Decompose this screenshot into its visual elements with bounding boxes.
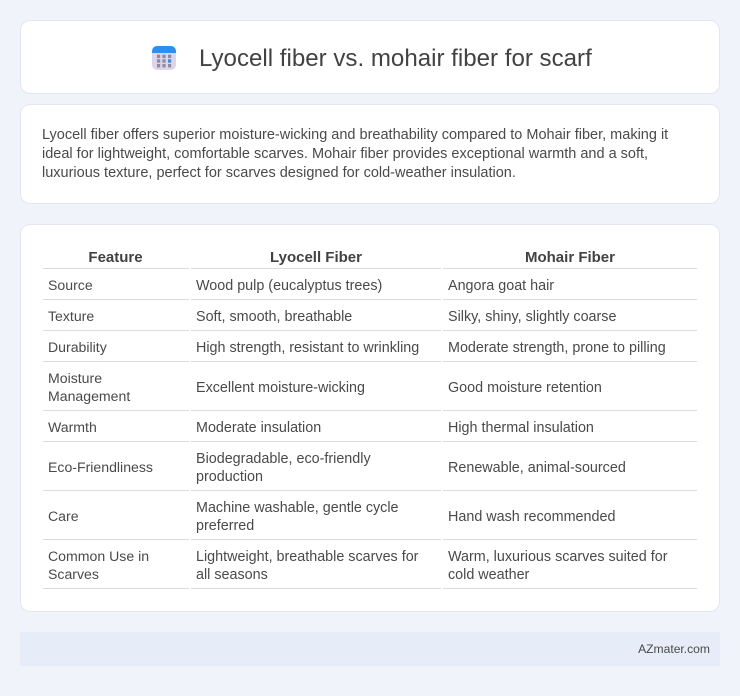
header: feature: Feature (88, 249, 143, 266)
row label: warmth: Warmth (48, 419, 97, 435)
mohair common use: Warm, luxurious scarves suited for (448, 549, 667, 565)
header: lyocell fiber: Lyocell Fiber (270, 249, 362, 266)
footer bar (20, 632, 720, 666)
row label: durability: Durability (48, 339, 107, 355)
lyocell common use: Lightweight, breathable scarves for (196, 549, 418, 565)
summary text: luxurious texture, perfect for scarves designed for cold-weather insulation. (42, 165, 516, 181)
lyocell care (196, 500, 399, 534)
title card (20, 20, 720, 94)
row label: eco-friendliness: Eco-Friendliness (48, 459, 153, 475)
title: Lyocell fiber vs. mohair fiber for scarf (199, 45, 592, 72)
mohair common use (448, 549, 668, 583)
mohair durability: Moderate strength, prone to pilling (448, 340, 666, 356)
lyocell source: Wood pulp (eucalyptus trees) (196, 278, 382, 294)
row label: care: Care (48, 508, 79, 524)
row label: texture: Texture (48, 308, 94, 324)
mohair eco-friendliness: Renewable, animal-sourced (448, 460, 626, 476)
lyocell care: Machine washable, gentle cycle (196, 500, 399, 516)
mohair source: Angora goat hair (448, 278, 554, 294)
table card (20, 224, 720, 612)
lyocell moisture: Excellent moisture-wicking (196, 380, 365, 396)
lyocell care: preferred (196, 518, 254, 534)
lyocell eco-friendliness: production (196, 469, 263, 485)
row label: source: Source (48, 277, 93, 293)
summary text: ideal for lightweight, comfortable scarves. Mohair fiber provides exceptional warmth and a soft, (42, 146, 648, 162)
row label: moisture management (48, 370, 130, 404)
mohair texture: Silky, shiny, slightly coarse (448, 309, 616, 325)
lyocell warmth: Moderate insulation (196, 420, 321, 436)
lyocell eco-friendliness: Biodegradable, eco-friendly (196, 451, 371, 467)
header: mohair fiber: Mohair Fiber (525, 249, 615, 266)
summary card (20, 104, 720, 204)
lyocell common use: all seasons (196, 567, 268, 583)
lyocell eco-friendliness (196, 451, 371, 485)
row label: moisture management: Management (48, 388, 130, 404)
mohair moisture: Good moisture retention (448, 380, 602, 396)
mohair care: Hand wash recommended (448, 509, 615, 525)
row label: moisture management: Moisture (48, 370, 102, 386)
icon: calendar (152, 46, 176, 70)
row label: common use in scarves (48, 548, 149, 582)
lyocell common use (196, 549, 418, 583)
lyocell durability: High strength, resistant to wrinkling (196, 340, 419, 356)
footer credit: AZmater.com (638, 642, 710, 656)
mohair warmth: High thermal insulation (448, 420, 594, 436)
mohair common use: cold weather (448, 567, 529, 583)
lyocell texture: Soft, smooth, breathable (196, 309, 352, 325)
summary text (42, 126, 668, 181)
row label: common use in scarves: Scarves (48, 566, 99, 582)
summary text: Lyocell fiber offers superior moisture-wicking and breathability compared to Mohair fiber, making it (42, 126, 668, 142)
row label: common use in scarves: Common Use in (48, 548, 149, 564)
